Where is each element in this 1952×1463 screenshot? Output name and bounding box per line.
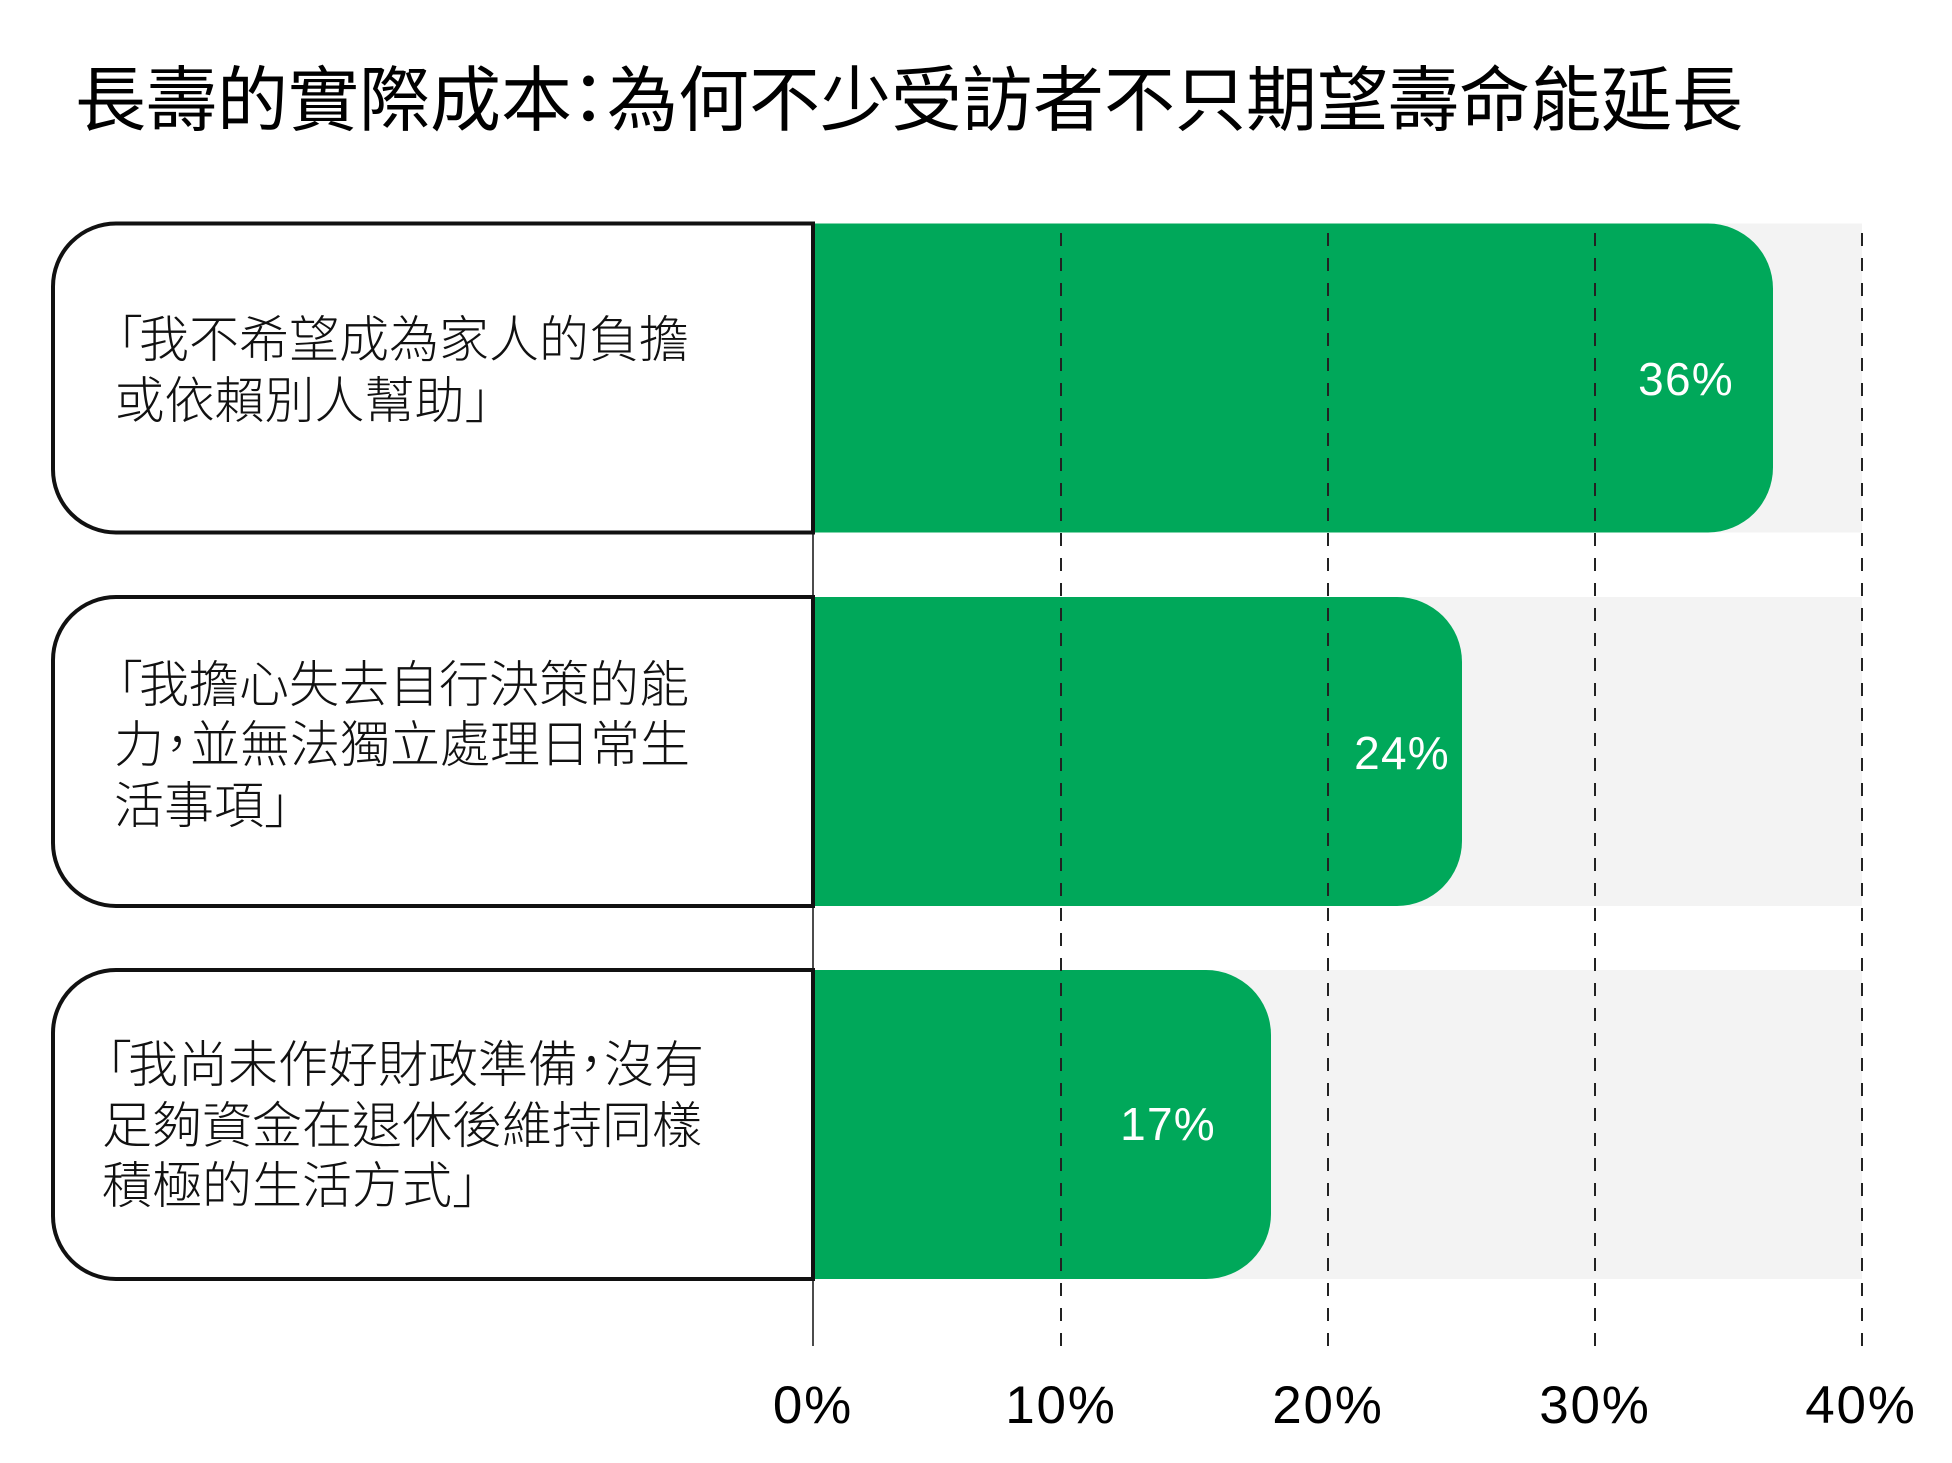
green bar 1: 36% xyxy=(814,224,1773,532)
label box 3 xyxy=(53,970,813,1279)
bar row 1 xyxy=(814,224,1862,532)
label text 1: 「 xyxy=(93,312,143,368)
axis labels: 30% xyxy=(1539,1376,1651,1435)
green bar 3: 17% xyxy=(814,970,1271,1279)
label text 1: 我不希望成為家人的負擔 xyxy=(139,312,689,368)
axis and dashed gridlines xyxy=(813,224,1862,1346)
label box 2 xyxy=(53,597,813,906)
title: 為何不少受訪者不只期望壽命能延長 xyxy=(607,44,1743,146)
label text 2: 並無法獨立處理日常生 xyxy=(190,717,690,773)
axis labels xyxy=(773,1376,1917,1435)
label text 3: 積極的生活方式」 xyxy=(102,1158,502,1214)
label text 2: 「 xyxy=(93,657,143,713)
label text 3: 沒有 xyxy=(604,1037,704,1093)
value label 24%: 24% xyxy=(1354,727,1450,779)
track 1 xyxy=(814,224,1862,532)
value label 36%: 36% xyxy=(1638,353,1734,405)
label text 3: 「 xyxy=(82,1037,132,1093)
bar row 3 xyxy=(814,970,1862,1279)
track 3 xyxy=(814,970,1862,1279)
label text 3: 足夠資金在退休後維持同樣 xyxy=(102,1098,702,1154)
bar row 2 xyxy=(814,597,1862,906)
title: 長壽的實際成本 xyxy=(75,44,572,146)
green bar 2: 24% xyxy=(814,597,1462,906)
title: ： xyxy=(553,44,624,146)
label text 2: 我擔心失去自行決策的能 xyxy=(139,657,689,713)
label text 3: ， xyxy=(566,1037,616,1093)
axis labels: 10% xyxy=(1005,1376,1117,1435)
axis labels: 40% xyxy=(1805,1376,1917,1435)
value label 17%: 17% xyxy=(1120,1098,1216,1150)
axis labels: 20% xyxy=(1272,1376,1384,1435)
axis labels: 0% xyxy=(773,1376,853,1435)
label text 1: 或依賴別人幫助」 xyxy=(114,373,514,429)
label box 1 xyxy=(53,224,813,532)
label text 2: 力 xyxy=(114,717,164,773)
label text 2: ， xyxy=(152,717,202,773)
track 2 xyxy=(814,597,1862,906)
label text 2: 活事項」 xyxy=(114,778,314,834)
label text 3: 我尚未作好財政準備 xyxy=(128,1037,578,1093)
